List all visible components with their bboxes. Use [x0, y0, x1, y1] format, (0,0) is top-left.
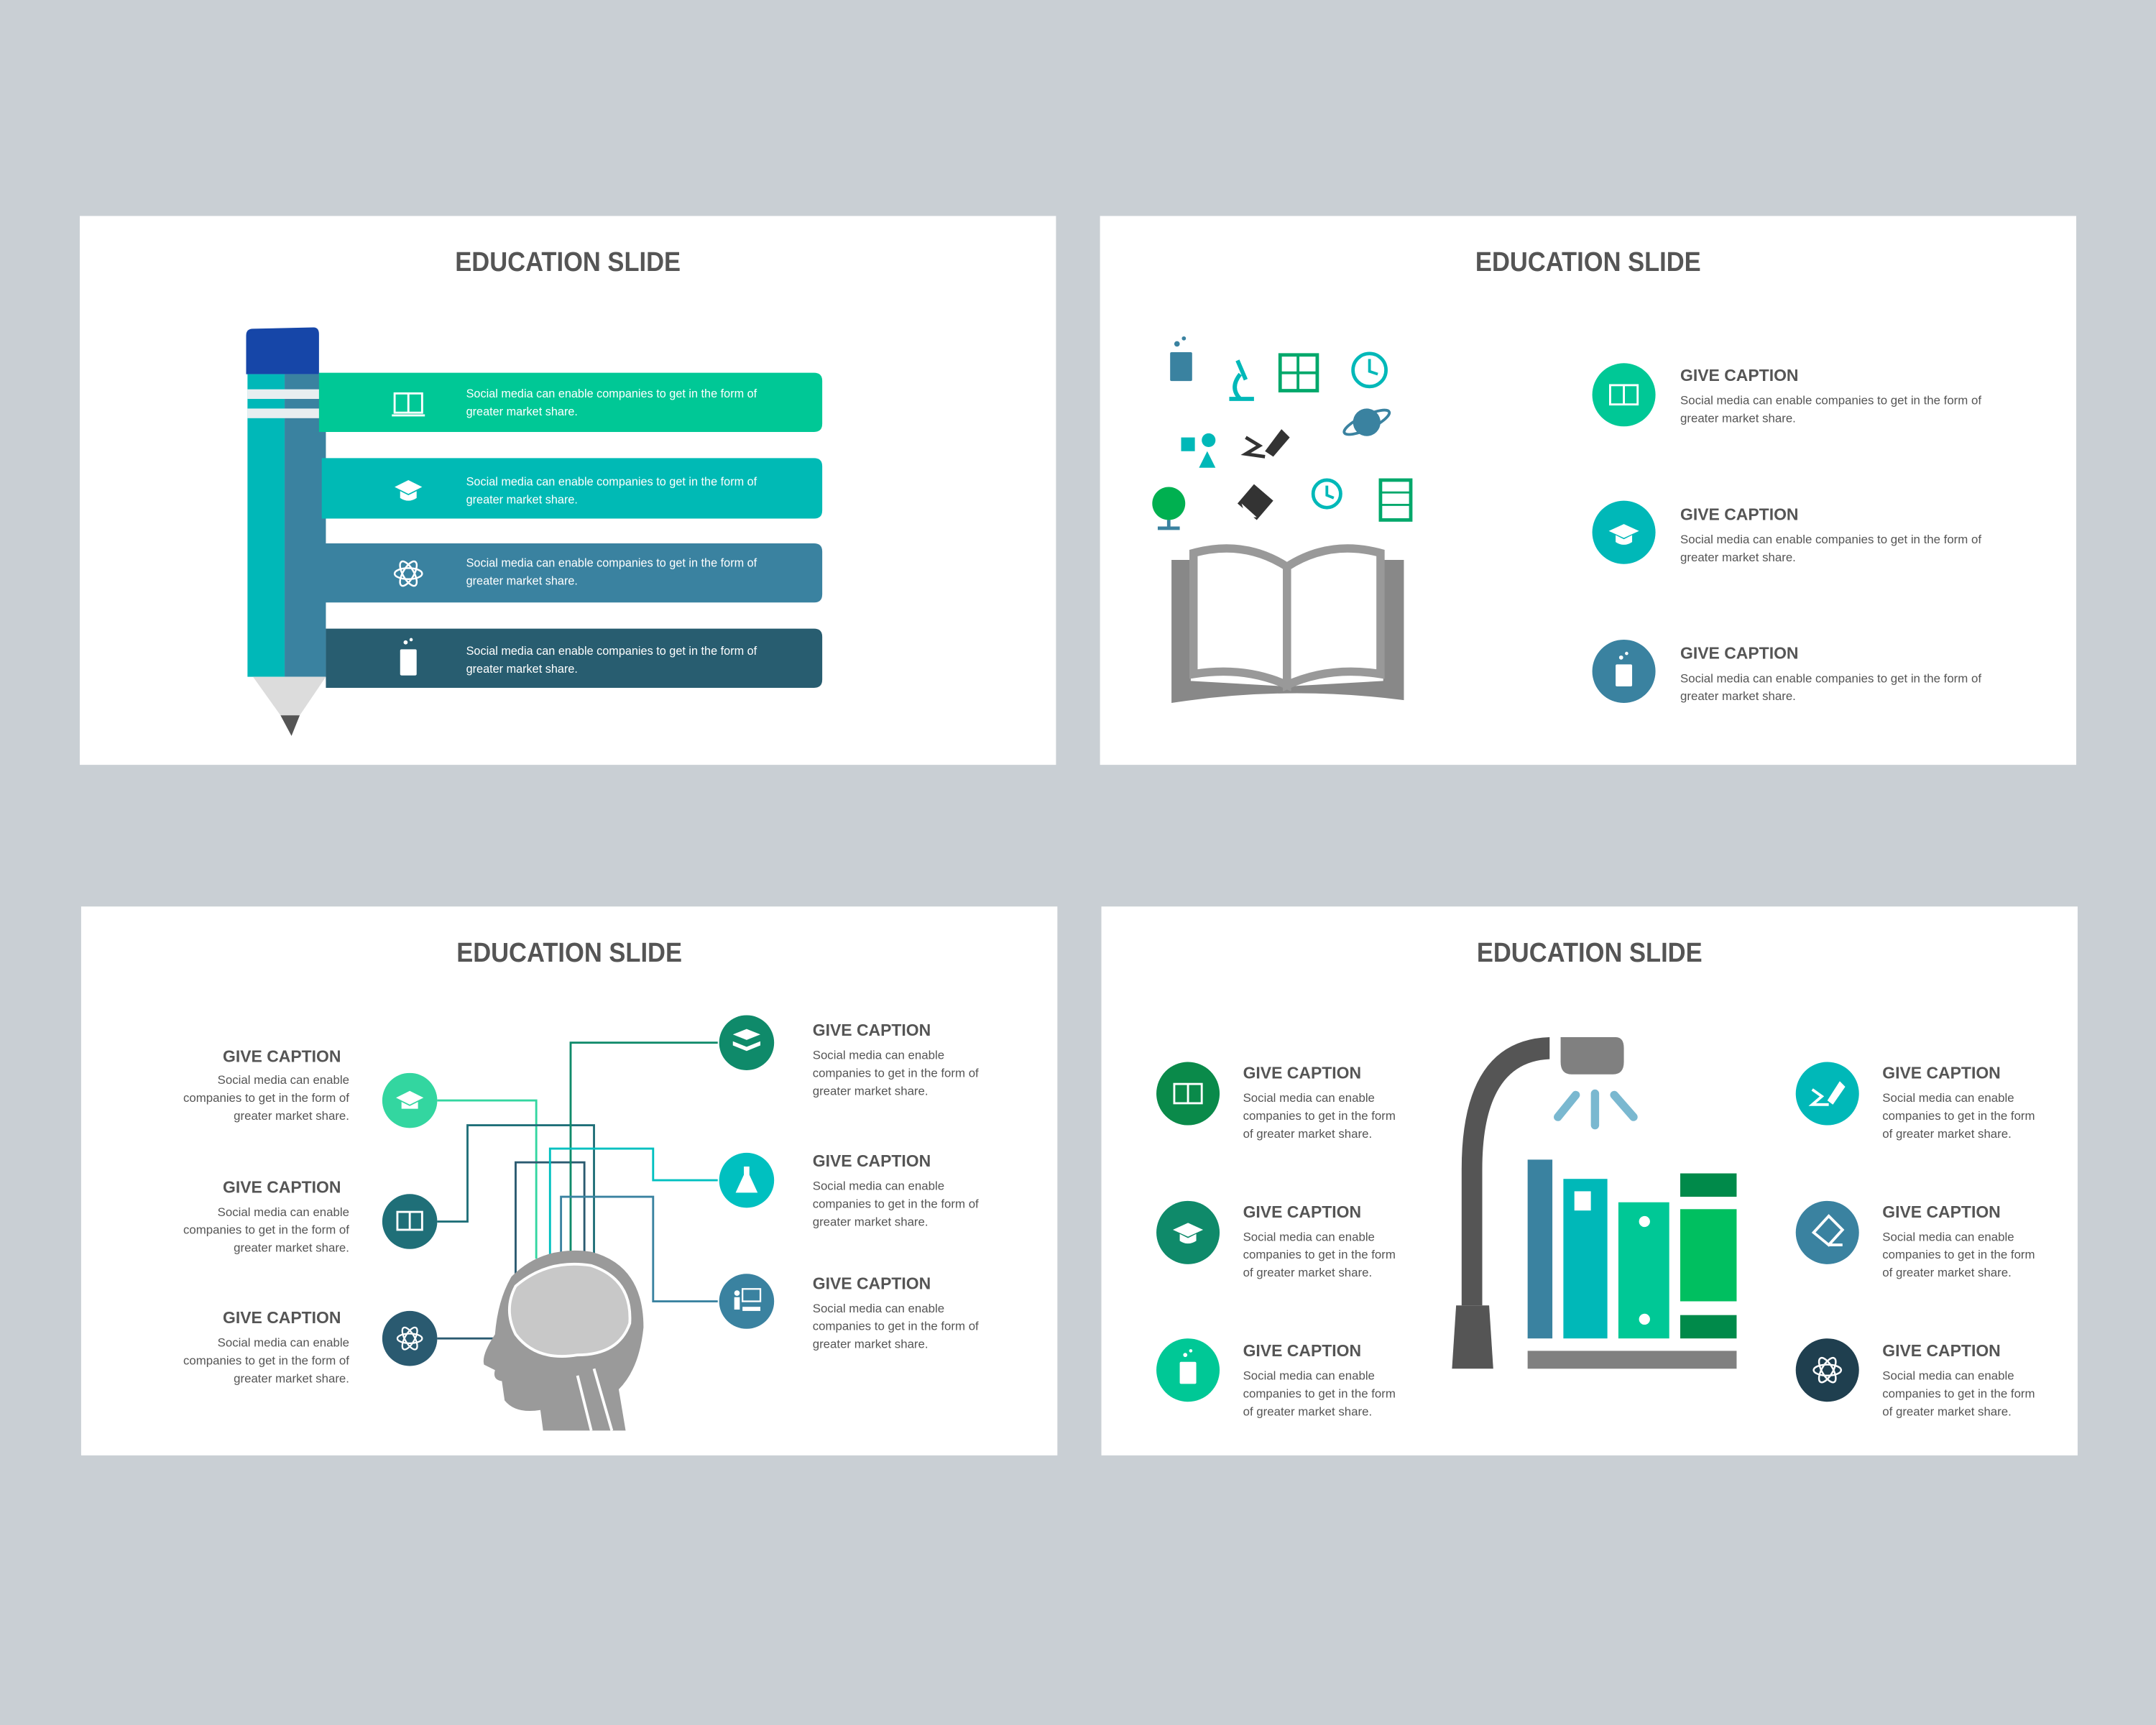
open book illustration: [1171, 548, 1404, 703]
title: EDUCATION SLIDE: [1475, 247, 1701, 277]
left caption 1: Social media can enable: [1243, 1091, 1375, 1105]
bar 1: [319, 373, 822, 432]
bar 1: Social media can enable companies to get in the form of: [466, 387, 757, 400]
left caption 1: [183, 1047, 437, 1128]
icon: graduation cap: [395, 480, 422, 501]
head with brain: [484, 1251, 643, 1430]
right caption 2: Social media can enable: [1882, 1230, 2014, 1243]
left caption 1: GIVE CAPTION: [1243, 1063, 1361, 1082]
bar 3: greater market share.: [466, 574, 578, 587]
caption 1: [1593, 363, 1981, 426]
panel: brain slide: [81, 906, 1057, 1455]
right caption 1: greater market share.: [813, 1084, 929, 1098]
panel: lamp and books slide: [1102, 906, 2078, 1455]
right caption 1: companies to get in the form: [1882, 1109, 2035, 1123]
bar 1: greater market share.: [466, 405, 578, 418]
panel: book slide: [1100, 216, 2076, 765]
caption 2: Social media can enable companies to get in the form of: [1680, 533, 1981, 546]
icon cluster: [1152, 336, 1411, 528]
icon: book: [392, 393, 425, 415]
left caption 1: companies to get in the form: [1243, 1109, 1396, 1123]
left caption 2: Social media can enable: [218, 1205, 349, 1219]
connector lines: [437, 1043, 718, 1338]
left caption 1: greater market share.: [234, 1109, 349, 1123]
bar 2: greater market share.: [466, 493, 578, 506]
right caption 3: Social media can enable: [813, 1302, 944, 1315]
left caption 3: [183, 1308, 437, 1385]
bar 4: [326, 629, 822, 688]
right caption 3: companies to get in the form: [1882, 1386, 2035, 1400]
left caption 3: GIVE CAPTION: [1243, 1341, 1361, 1360]
caption 2: greater market share.: [1680, 551, 1796, 564]
right caption 3: [719, 1274, 979, 1351]
right caption 1: Social media can enable: [1882, 1091, 2014, 1105]
right caption 1: [1796, 1062, 2035, 1141]
caption 3: greater market share.: [1680, 689, 1796, 703]
caption 3: Social media can enable companies to get in the form of: [1680, 671, 1981, 685]
right caption 3: of greater market share.: [1882, 1404, 2012, 1418]
left caption 1: GIVE CAPTION: [223, 1047, 341, 1066]
right caption 1: [719, 1015, 979, 1098]
left caption 1: of greater market share.: [1243, 1127, 1372, 1141]
left caption 2: [1156, 1201, 1396, 1279]
caption 3: GIVE CAPTION: [1680, 644, 1799, 663]
icon: beaker: [400, 638, 417, 676]
caption 1: Social media can enable companies to get in the form of: [1680, 394, 1981, 408]
left caption 3: companies to get in the form: [1243, 1386, 1396, 1400]
right caption 2: [719, 1151, 979, 1228]
left caption 1: companies to get in the form of: [183, 1091, 349, 1105]
right caption 3: greater market share.: [813, 1338, 929, 1351]
right caption 1: GIVE CAPTION: [1882, 1063, 2001, 1082]
right caption 3: Social media can enable: [1882, 1369, 2014, 1383]
left caption 2: [183, 1177, 437, 1255]
panel: pencil slide: [80, 216, 1056, 765]
right caption 2: [1796, 1201, 2035, 1279]
right caption 3: GIVE CAPTION: [813, 1274, 931, 1292]
caption 1: greater market share.: [1680, 412, 1796, 426]
right caption 2: GIVE CAPTION: [1882, 1202, 2001, 1221]
right caption 2: greater market share.: [813, 1215, 929, 1228]
right caption 2: GIVE CAPTION: [813, 1151, 931, 1170]
left caption 2: greater market share.: [234, 1241, 349, 1255]
right caption 3: [1796, 1338, 2035, 1418]
bar 2: [322, 458, 822, 519]
left caption 2: of greater market share.: [1243, 1266, 1372, 1279]
left caption 2: companies to get in the form: [1243, 1248, 1396, 1261]
right caption 2: companies to get in the form of: [813, 1197, 979, 1210]
caption 2: [1593, 501, 1981, 564]
left caption 3: Social media can enable: [1243, 1369, 1375, 1383]
left caption 2: Social media can enable: [1243, 1230, 1375, 1243]
right caption 1: companies to get in the form of: [813, 1067, 979, 1080]
lamp: [1452, 1037, 1634, 1368]
caption 1: GIVE CAPTION: [1680, 366, 1799, 385]
books on shelf: [1528, 1159, 1736, 1368]
left caption 3: Social media can enable: [218, 1336, 349, 1350]
right caption 3: GIVE CAPTION: [1882, 1341, 2001, 1360]
bar 3: Social media can enable companies to get in the form of: [466, 557, 757, 570]
bar 4: greater market share.: [466, 663, 578, 676]
left caption 3: companies to get in the form of: [183, 1354, 349, 1368]
left caption 3: of greater market share.: [1243, 1404, 1372, 1418]
left caption 3: [1156, 1338, 1396, 1418]
title: EDUCATION SLIDE: [1477, 937, 1703, 968]
caption 2: GIVE CAPTION: [1680, 505, 1799, 523]
bar 3: [325, 543, 822, 602]
right caption 2: of greater market share.: [1882, 1266, 2012, 1279]
left caption 1: Social media can enable: [218, 1073, 349, 1087]
bar 4: Social media can enable companies to get in the form of: [466, 645, 757, 658]
right caption 1: of greater market share.: [1882, 1127, 2012, 1141]
right caption 3: companies to get in the form of: [813, 1320, 979, 1333]
title: EDUCATION SLIDE: [456, 937, 682, 968]
pencil: [246, 328, 326, 736]
bar 2: Social media can enable companies to get in the form of: [466, 476, 757, 489]
left caption 2: GIVE CAPTION: [1243, 1202, 1361, 1221]
left caption 2: companies to get in the form of: [183, 1223, 349, 1237]
right caption 1: Social media can enable: [813, 1049, 944, 1062]
left caption 3: greater market share.: [234, 1371, 349, 1385]
left caption 3: GIVE CAPTION: [223, 1308, 341, 1327]
right caption 2: companies to get in the form: [1882, 1248, 2035, 1261]
caption 3: [1593, 640, 1981, 703]
left caption 2: GIVE CAPTION: [223, 1177, 341, 1196]
right caption 1: GIVE CAPTION: [813, 1021, 931, 1039]
icon: atom: [395, 559, 422, 588]
left caption 1: [1156, 1062, 1396, 1141]
title: EDUCATION SLIDE: [455, 247, 681, 277]
right caption 2: Social media can enable: [813, 1179, 944, 1193]
